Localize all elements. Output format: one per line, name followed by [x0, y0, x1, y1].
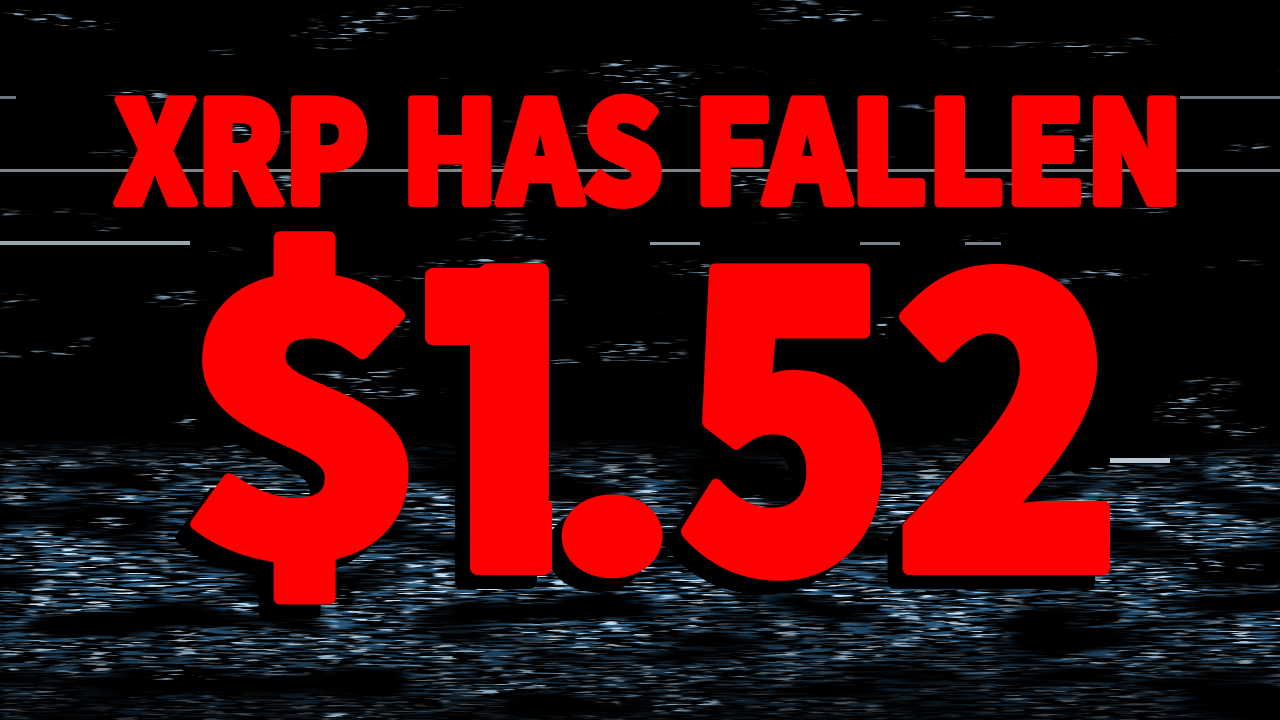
price: $1.52 with black drop shadow: 2: [893, 103, 1123, 685]
title: XRP HAS FALLEN: FALLEN: [693, 43, 1184, 244]
price: $1.52 with black drop shadow: $: [180, 125, 430, 659]
price: $1.52 with black drop shadow: 5: [678, 92, 896, 686]
title: XRP HAS FALLEN: HAS: [401, 43, 663, 244]
price: $1.52 with black drop shadow: .: [540, 187, 684, 663]
price: $1.52 with black drop shadow: [175, 231, 1110, 618]
price: $1.52 with black drop shadow: 1: [372, 93, 622, 687]
title: XRP HAS FALLEN: [115, 43, 1184, 244]
title: XRP HAS FALLEN: XRP: [115, 43, 369, 244]
